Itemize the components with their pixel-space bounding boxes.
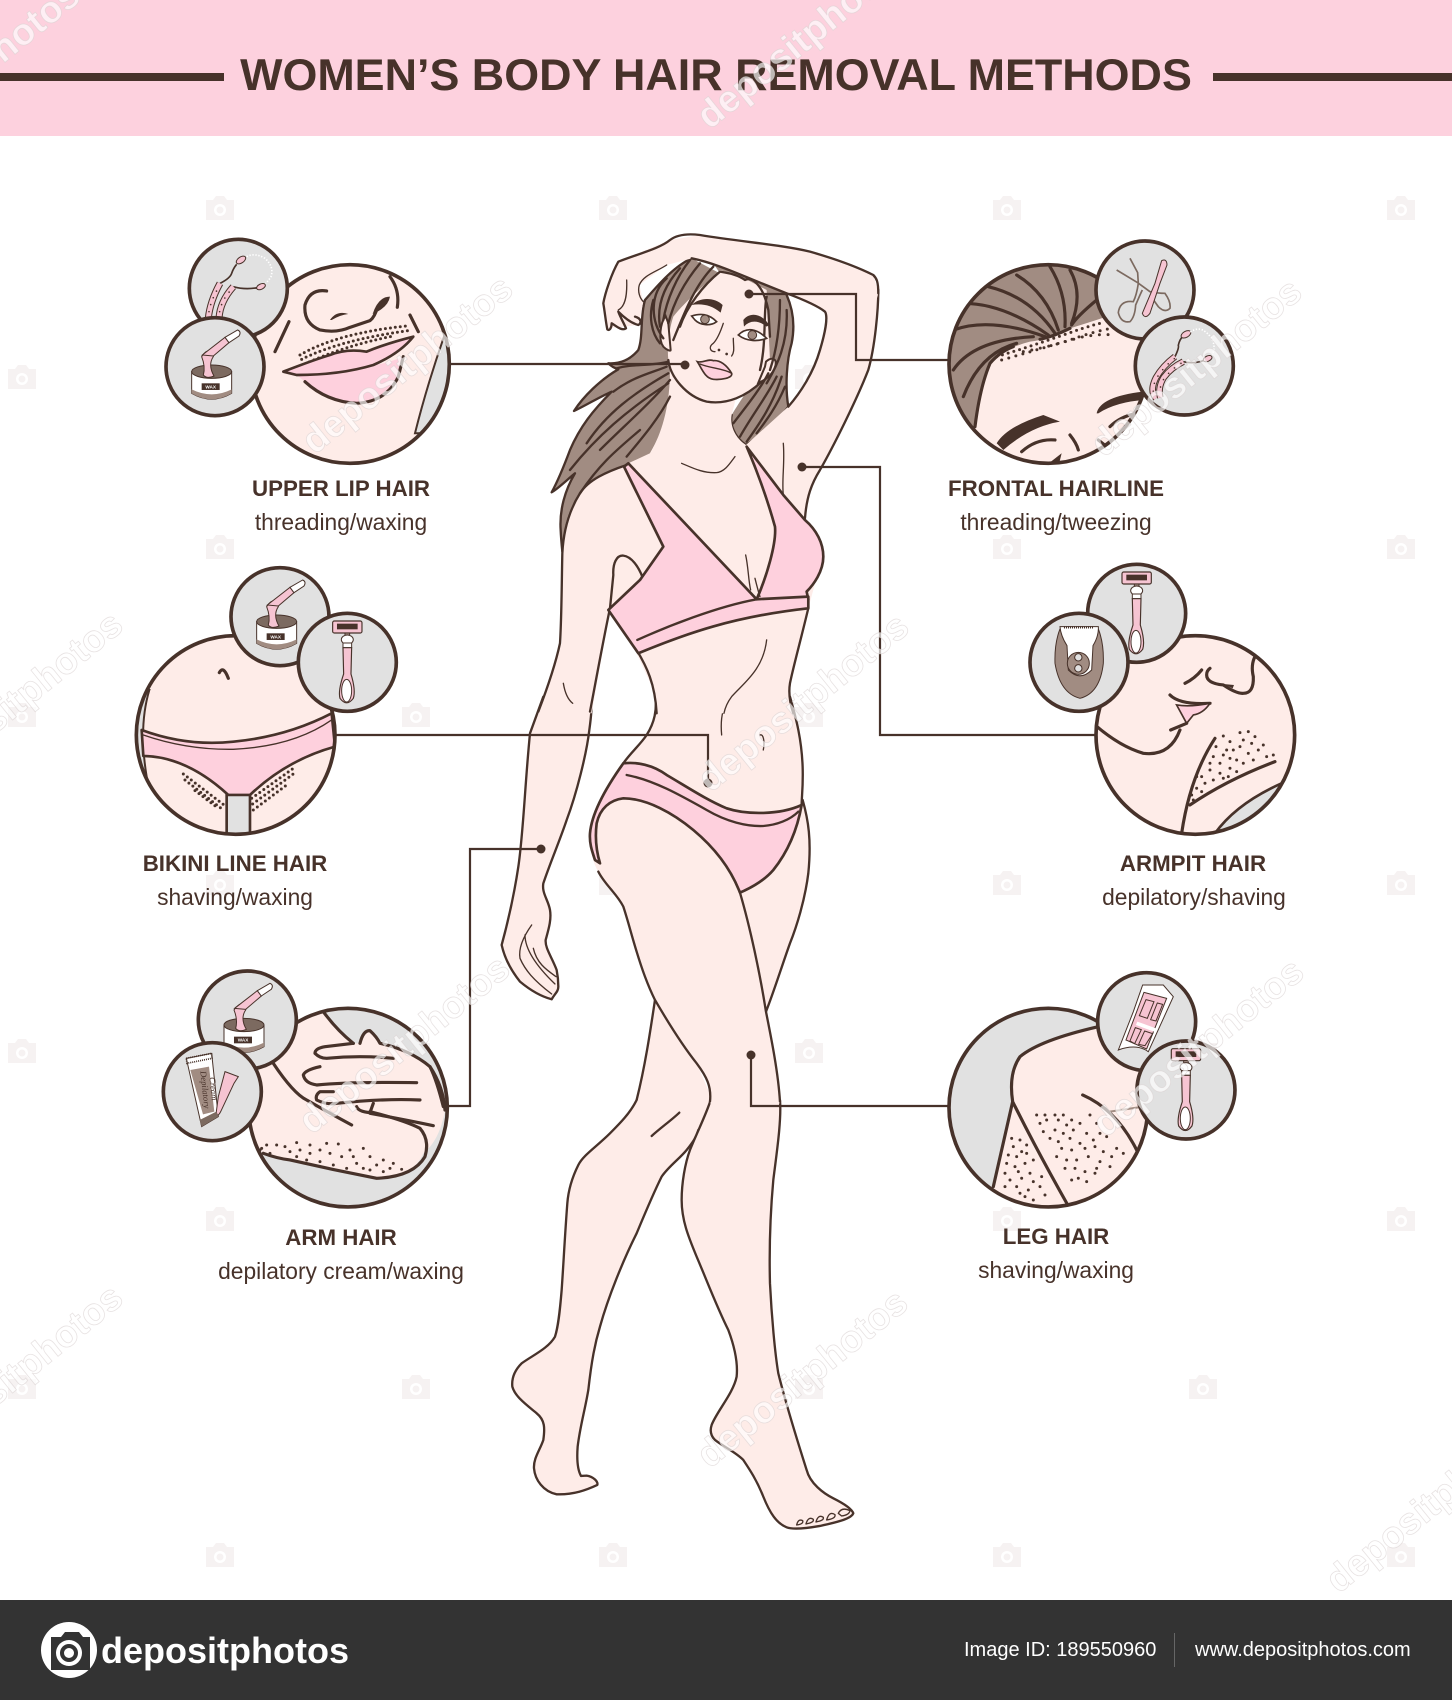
hairline close-up (947, 260, 1145, 467)
panel: arm (163, 971, 447, 1207)
raised forearm and hand (603, 234, 878, 407)
hair (552, 258, 793, 552)
connector: arm (448, 844, 546, 1106)
label: leg hair (978, 1224, 1134, 1283)
bra (608, 447, 823, 653)
icon: epilator (1030, 613, 1128, 711)
label: bikini line hair: BIKINI LINE HAIR (143, 851, 327, 876)
head and face (570, 260, 787, 493)
armpit close-up (1098, 656, 1280, 832)
label: armpit hair: ARMPIT HAIR (1120, 851, 1266, 876)
nose (710, 323, 734, 356)
text: depositphotos (688, 1280, 915, 1475)
icon: depilatory cream (163, 1043, 261, 1141)
central woman figure (502, 234, 878, 1529)
label: upper lip hair: threading/waxing (255, 509, 427, 535)
label: armpit hair: depilatory/shaving (1102, 884, 1286, 910)
leg close-up (992, 1026, 1145, 1205)
label: upper lip hair: UPPER LIP HAIR (252, 476, 430, 501)
icon: razor (298, 613, 396, 711)
neck, chest, shoulder and raised upper arm (538, 275, 878, 713)
upper lip close-up (275, 277, 460, 433)
text: depositphotos (689, 604, 916, 799)
connector: bikini line (336, 735, 712, 788)
connector: frontal hairline (744, 290, 948, 360)
brows (692, 299, 723, 313)
arm and hand close-up (243, 1012, 445, 1178)
connector: upper lip (448, 360, 690, 370)
icon: wax jar (198, 971, 296, 1069)
icon: razor (1137, 1041, 1235, 1139)
panel: upper lip hair (166, 239, 460, 463)
footer image id: Image ID: 189550960 (964, 1639, 1156, 1661)
label: frontal hairline: threading/tweezing (960, 509, 1152, 535)
icon: wax jar (231, 568, 329, 666)
label: arm hair: ARM HAIR (285, 1225, 397, 1250)
bikini line close-up (130, 670, 335, 840)
panel: leg (949, 973, 1235, 1217)
icon: thread (189, 239, 287, 337)
panel: armpit (1030, 564, 1303, 840)
icon: footer logo camera (41, 1622, 97, 1678)
label: arm hair (218, 1225, 464, 1284)
icon: wax strip (1098, 973, 1196, 1071)
label: bikini line hair: shaving/waxing (157, 884, 313, 910)
text: depositphotos (293, 266, 520, 461)
label: frontal hairline (948, 476, 1164, 535)
hair strands (570, 260, 787, 493)
back thigh (740, 800, 810, 1012)
footer brand name: depositphotos (101, 1630, 349, 1671)
icon: razor (1088, 564, 1186, 662)
text: depositphotos (1084, 949, 1311, 1144)
footer website: www.depositphotos.com (1194, 1639, 1411, 1661)
title: WOMEN’S BODY HAIR REMOVAL METHODS (240, 49, 1192, 100)
label: bikini line hair (143, 851, 327, 910)
label: upper lip hair (252, 476, 430, 535)
label: leg hair: LEG HAIR (1003, 1224, 1109, 1249)
icon: thread (1135, 317, 1233, 415)
lips (697, 360, 732, 379)
footer bar (0, 1600, 1452, 1700)
front lower leg and foot (682, 1100, 853, 1529)
panel: frontal hairline (947, 241, 1233, 467)
text: depositphotos (290, 946, 517, 1141)
ears (660, 316, 671, 351)
label: leg hair: shaving/waxing (978, 1257, 1134, 1283)
icon: depilatory cream: Cream (207, 1077, 220, 1101)
label: armpit hair (1102, 851, 1286, 910)
left rear leg (512, 1000, 713, 1494)
icon: depilatory cream: Depilatory (198, 1070, 212, 1109)
eyes (692, 314, 717, 325)
torso and front thigh (590, 697, 803, 1103)
panel: bikini line (130, 568, 396, 840)
label: frontal hairline: FRONTAL HAIRLINE (948, 476, 1164, 501)
text: depositphotos (1082, 269, 1309, 464)
icon: tweezers (1096, 241, 1194, 339)
icon: wax jar (166, 318, 264, 416)
label: arm hair: depilatory cream/waxing (218, 1258, 464, 1284)
hanging forearm and hand (502, 697, 592, 999)
connector: leg (746, 1050, 948, 1106)
header band (0, 0, 1452, 136)
connector: armpit (798, 462, 1096, 735)
bikini bottom (590, 763, 802, 893)
